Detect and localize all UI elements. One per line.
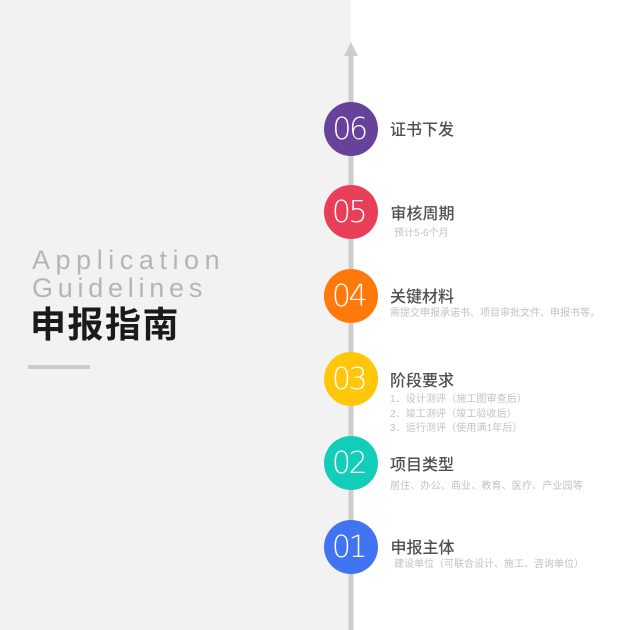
step 01 badge <box>324 520 378 574</box>
english heading: Application <box>32 245 225 275</box>
step 01 badge: 01 <box>332 530 365 565</box>
step 04 badge: 04 <box>332 279 365 314</box>
step 02 badge <box>324 436 378 490</box>
step 03 description: 1．设计测评（施工图审查后） <box>390 394 527 405</box>
step 02 badge: 02 <box>332 446 365 481</box>
step 03 description: 2．竣工测评（竣工验收后） <box>390 408 517 420</box>
step 03 badge: 03 <box>332 362 365 397</box>
step 01 description: 建设单位（可联合设计、施工、咨询单位） <box>394 559 584 570</box>
step 05 description: 预计5-6个月 <box>394 228 448 239</box>
step 01 title: 申报主体 <box>390 540 455 557</box>
heading underline <box>28 365 90 369</box>
step 04 badge <box>324 269 378 323</box>
step 04 title: 关键材料 <box>390 289 454 306</box>
step 05 title: 审核周期 <box>390 206 455 223</box>
step 06 badge: 06 <box>332 112 366 147</box>
step 05 badge: 05 <box>332 195 365 230</box>
step 03 badge <box>324 352 378 406</box>
step 03 description: 3．运行测评（使用满1年后） <box>390 423 523 434</box>
english heading: Guidelines <box>32 273 207 303</box>
step 06 title: 证书下发 <box>390 122 454 139</box>
step 02 title: 项目类型 <box>390 457 454 474</box>
step 04 description: 需提交申报承诺书、项目审批文件、申报书等。 <box>390 308 600 319</box>
chinese heading: 申报指南 <box>30 304 180 345</box>
step 03 title: 阶段要求 <box>390 373 454 390</box>
english heading <box>32 245 225 303</box>
step 05 badge <box>324 185 378 239</box>
step 02 description: 居住、办公、商业、教育、医疗、产业园等 <box>390 481 583 492</box>
step 03 description <box>390 393 527 434</box>
left grey panel <box>0 0 351 630</box>
step 06 badge <box>324 102 378 156</box>
timeline arrow <box>344 42 358 630</box>
